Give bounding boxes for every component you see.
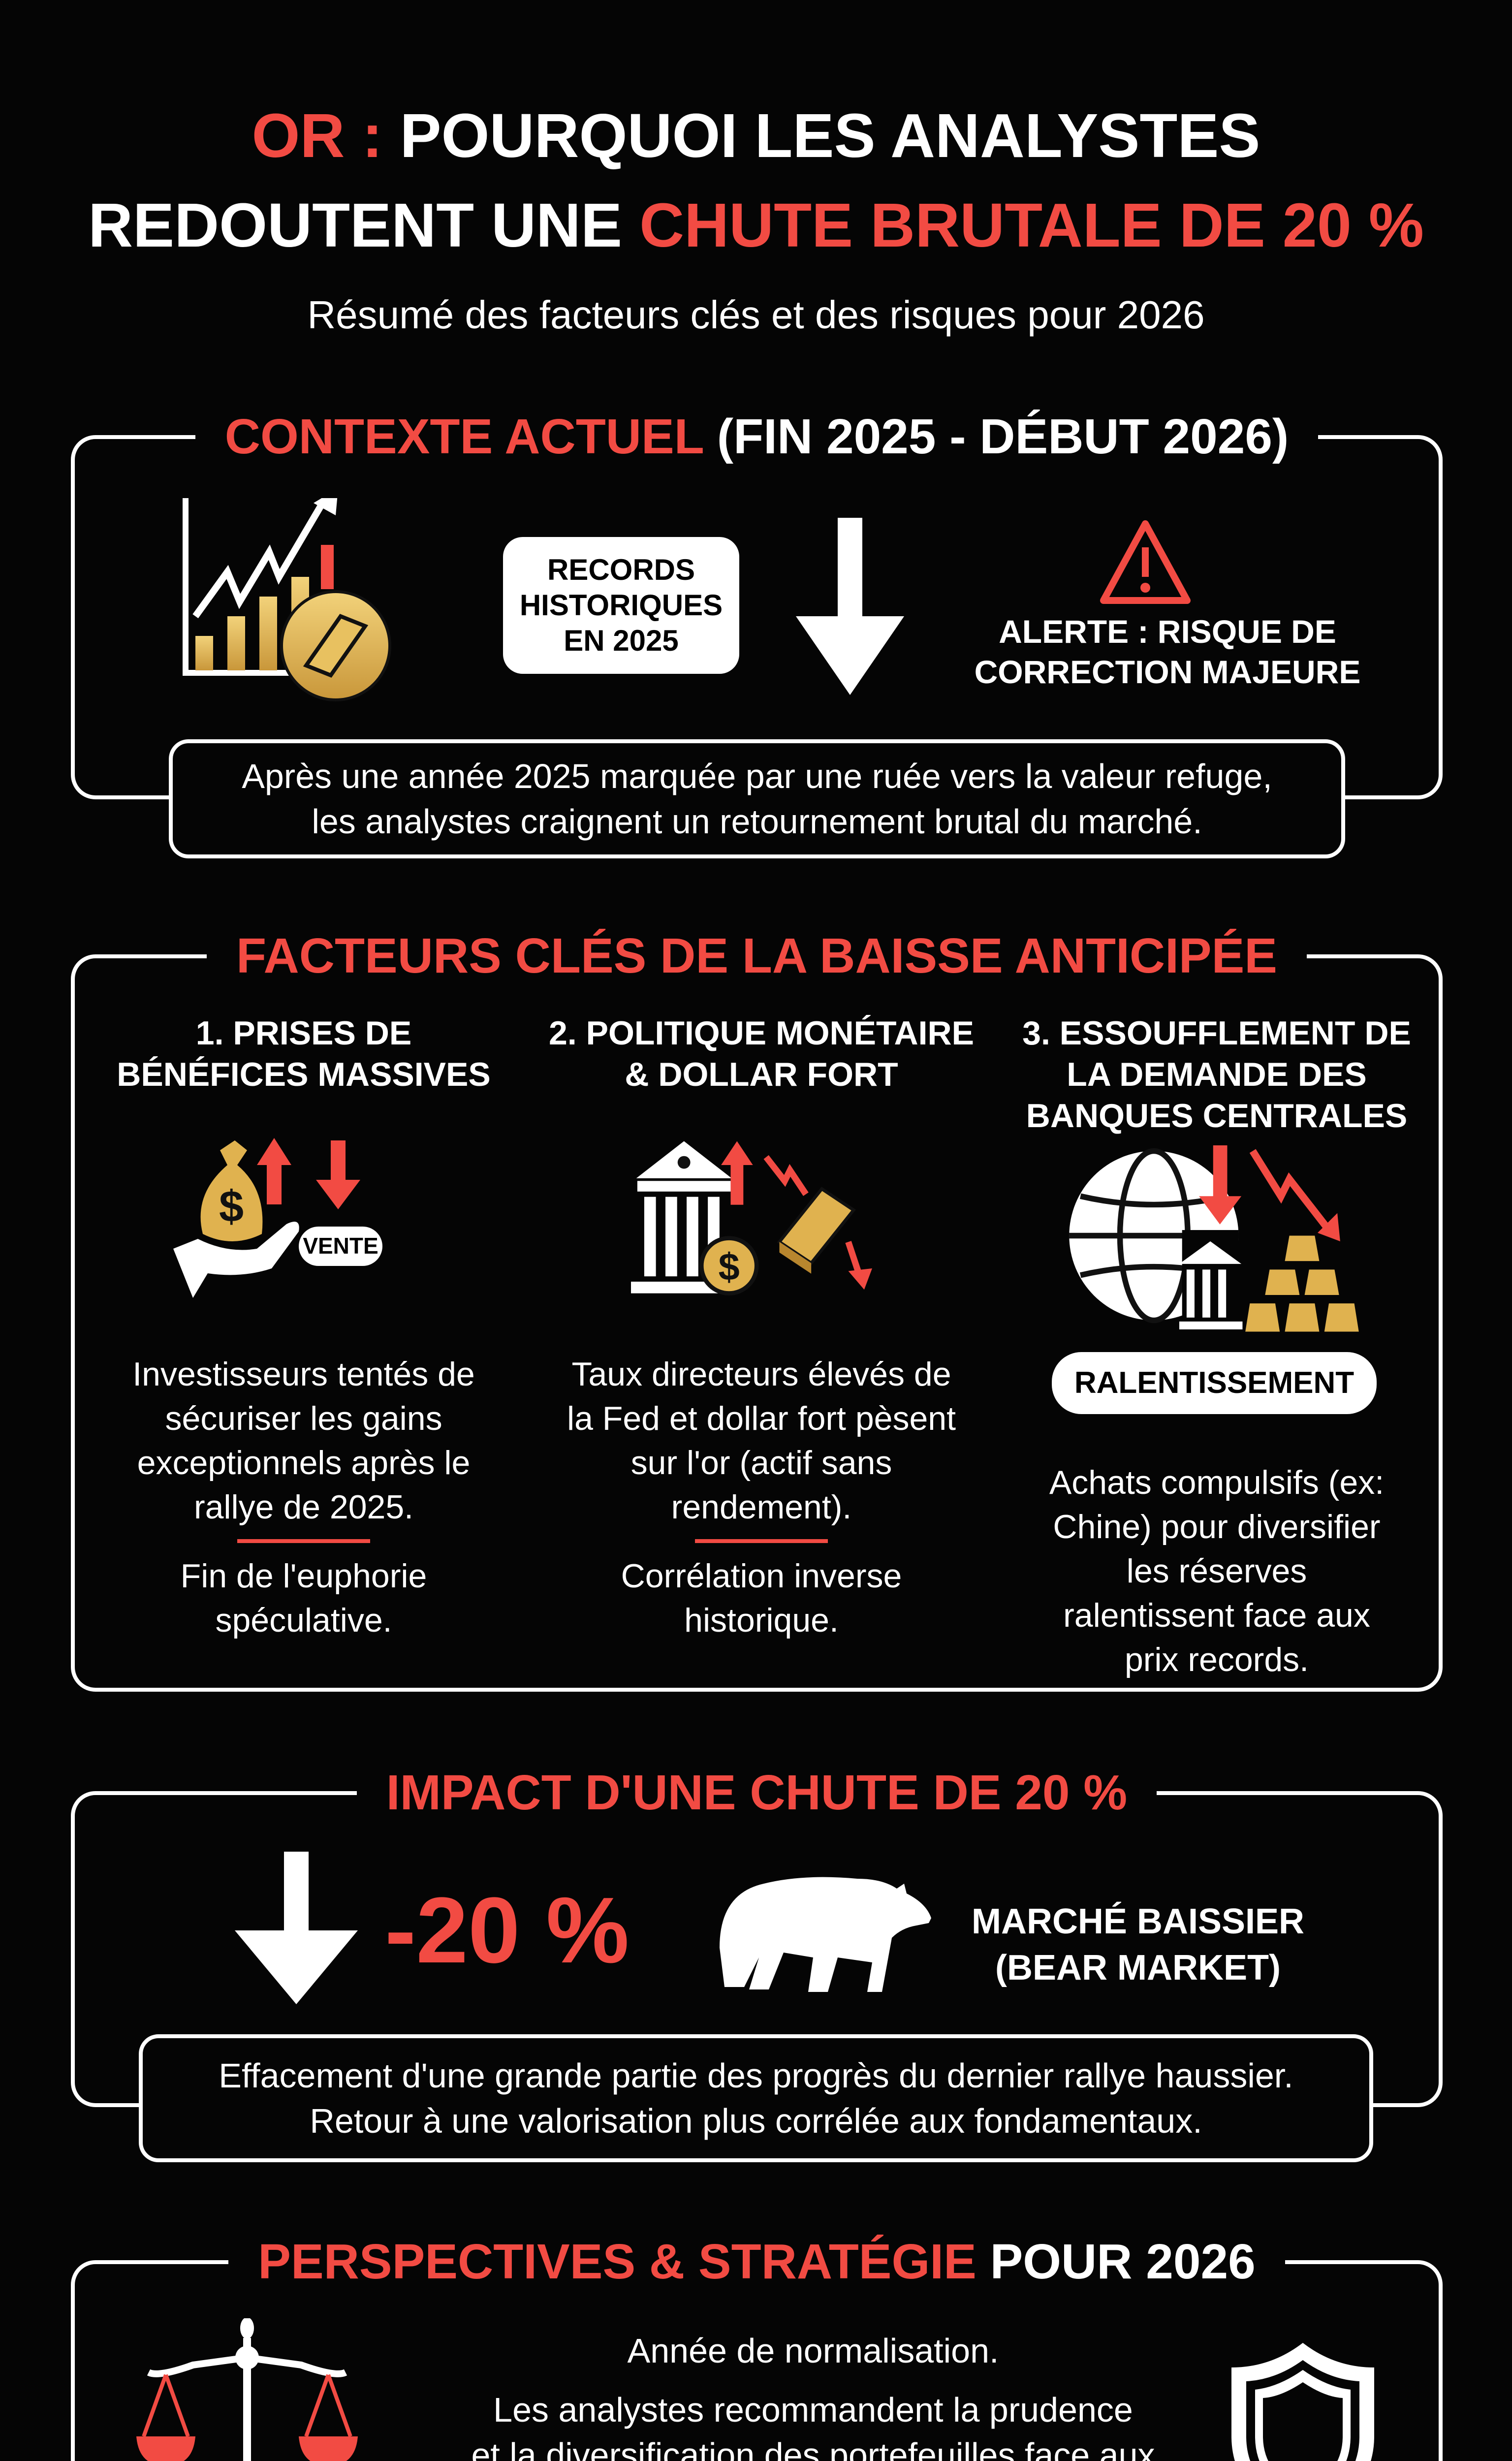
text: column 2 body: sur l'or (actif sans [631,1444,892,1482]
column title 2 [549,1014,974,1093]
icon: warning triangle [1100,520,1191,604]
icon: money bag hand with arrows: VENTE [303,1233,378,1259]
text box: contexte summary [169,739,1345,858]
heading: impact: IMPACT D'UNE CHUTE DE 20 % [386,1765,1127,1820]
text box: contexte summary: Après une année 2025 marquée par une ruée vers la valeur refuge, [242,757,1272,795]
panel: perspectives: Les analystes recommandent la prudence [493,2391,1133,2429]
column title 1: BÉNÉFICES MASSIVES [117,1056,491,1093]
title [88,101,1424,260]
text: column 3 body: les réserves [1127,1552,1307,1590]
arrow: down [796,518,904,695]
text: column 1 conclusion: spéculative. [215,1602,392,1639]
column title 1 [117,1014,491,1093]
text: alerte: CORRECTION MAJEURE [975,654,1360,690]
arrow: down large [232,1852,360,2007]
icon: bear [710,1864,946,1997]
column title 3: 3. ESSOUFFLEMENT DE [1022,1014,1411,1052]
text: column 1 body: exceptionnels après le [137,1444,470,1482]
icon: rising chart with gold coin [183,498,391,701]
text: alerte [975,613,1360,690]
text: bear market: MARCHÉ BAISSIER [972,1902,1304,1941]
column title 2: & DOLLAR FORT [625,1056,898,1093]
text: column 3 body: ralentissent face aux [1063,1597,1370,1634]
callout: records historiques: HISTORIQUES [520,589,723,622]
text box: impact summary: Retour à une valorisation plus corrélée aux fondamentaux. [310,2102,1202,2140]
subtitle: Résumé des facteurs clés et des risques pour 2026 [307,293,1205,337]
heading: facteurs: FACTEURS CLÉS DE LA BAISSE ANTICIPÉE [236,928,1277,983]
text: column 2 body: la Fed et dollar fort pèsent [567,1400,956,1437]
column title 3: BANQUES CENTRALES [1026,1097,1407,1135]
icon: bank, coin, gold bar: $ [719,1246,740,1289]
text: column 3 body: Achats compulsifs (ex: [1049,1464,1384,1501]
text box: impact summary [139,2034,1373,2162]
icon: globe bank and gold stack [1054,1145,1389,1337]
heading: perspectives: PERSPECTIVES & STRATÉGIE POUR 2026 [258,2234,1256,2289]
callout: records historiques: EN 2025 [564,624,679,657]
icon: bank, coin, gold bar [631,1141,872,1295]
heading: contexte: CONTEXTE ACTUEL (FIN 2025 - DÉBUT 2026) [225,409,1289,464]
text: column 1 conclusion: Fin de l'euphorie [181,1557,427,1595]
callout: ralentissement: RALENTISSEMENT [1074,1366,1354,1400]
stat: -20 %: -20 % [385,1878,629,1983]
text: column 3 body: prix records. [1125,1641,1309,1678]
text: perspectives body: Année de normalisation. [628,2332,999,2370]
text: column 1 body [132,1356,475,1526]
column title 3 [990,1012,1443,1136]
callout: records historiques [503,537,739,674]
text: alerte: ALERTE : RISQUE DE [999,613,1336,650]
title: OR : POURQUOI LES ANALYSTES [252,101,1260,170]
text: column 2 conclusion: Corrélation inverse [621,1557,902,1595]
text: column 2 body: rendement). [671,1488,851,1526]
icon: scales [134,2318,360,2461]
text: column 3 body: Chine) pour diversifier [1053,1508,1381,1546]
text: bear market [961,1898,1315,1991]
column title 1: 1. PRISES DE [196,1014,411,1052]
panel: perspectives [71,2260,1443,2461]
text: column 1 body: sécuriser les gains [165,1400,442,1437]
text: column 2 body: Taux directeurs élevés de [571,1356,951,1393]
column 1: prises de bénéfices [117,1014,491,1639]
column title 2: 2. POLITIQUE MONÉTAIRE [549,1014,974,1052]
column 3: banques centrales [990,1012,1443,1667]
text: column 1 conclusion [181,1557,427,1639]
text: column 2 conclusion: historique. [684,1602,839,1639]
text box: contexte summary: les analystes craignent un retournement brutal du marché. [312,802,1202,841]
callout: ralentissement [1052,1352,1377,1414]
text: column 2 body [567,1356,956,1526]
callout: records historiques: RECORDS [547,553,695,586]
text: column 2 conclusion [621,1557,902,1639]
text: column 1 body: rallye de 2025. [194,1488,413,1526]
panel: impact [71,1791,1443,2107]
icon: money bag hand with arrows [173,1138,382,1298]
panel: contexte actuel [71,435,1443,799]
text: column 3 body [990,1460,1443,1682]
panel: facteurs clés [71,954,1443,1692]
column 2: politique monétaire [549,1014,974,1639]
text: column 1 body: Investisseurs tentés de [132,1356,475,1393]
icon: money bag hand with arrows: $ [219,1182,244,1231]
text: bear market: (BEAR MARKET) [995,1948,1281,1988]
text box: impact summary: Effacement d'une grande partie des progrès du dernier rallye haussier. [219,2056,1293,2095]
column title 3: LA DEMANDE DES [1067,1056,1367,1093]
title: REDOUTENT UNE CHUTE BRUTALE DE 20 % [88,190,1424,260]
icon: shield [1227,2338,1379,2461]
